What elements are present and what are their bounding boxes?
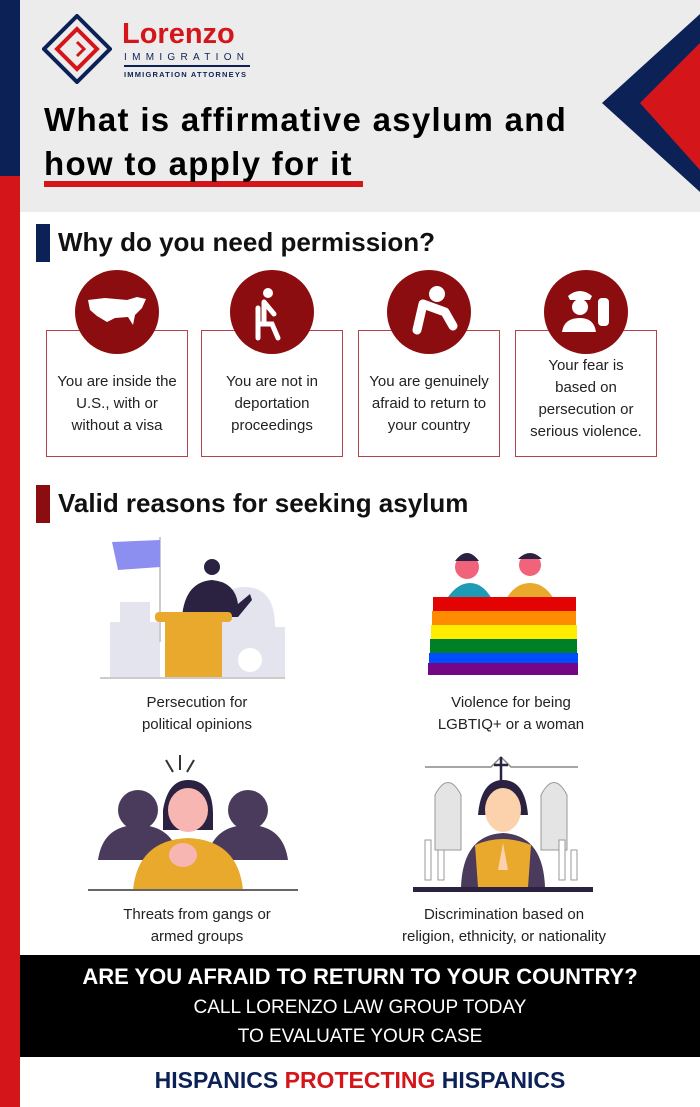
logo: Lorenzo [122,18,235,50]
illustration: gangs [88,755,298,891]
illustration: political [100,537,285,678]
cta band: ARE YOU AFRAID TO RETURN TO YOUR COUNTRY? [82,964,638,989]
card 3: You are genuinely [369,372,489,390]
caption: political [142,694,252,733]
icon: seated person [230,270,314,354]
card 4: based on [555,378,617,396]
caption: LGBTIQ [438,694,584,733]
illustration: religion [413,756,593,892]
card 4: Your fear is [548,356,624,374]
title: What is affirmative asylum and [44,101,567,138]
card 3 [358,270,500,457]
card 1: U.S., with or [76,394,158,412]
card 4: serious violence. [530,422,642,440]
card 4: persecution or [538,400,634,418]
chevron decoration [602,14,700,192]
logo: IMMIGRATION ATTORNEYS [124,70,247,79]
caption: religion: religion, ethnicity, or nationality [402,928,606,945]
card 1: You are inside the [57,372,177,390]
icon: afraid person [387,270,471,354]
illustration: LGBTIQ [428,553,578,675]
icon: police officer [544,270,628,354]
caption: political: Persecution for [147,694,247,711]
logo [42,14,250,84]
caption: gangs: armed groups [151,928,243,945]
title [44,101,567,187]
heading: why permission: Why do you need permission? [58,227,435,257]
cta band [20,955,700,1057]
caption: gangs: Threats from gangs or [123,906,271,923]
heading: valid reasons: Valid reasons for seeking asylum [58,488,468,518]
card 2: deportation [234,394,310,412]
caption: political: political opinions [142,716,252,733]
header background [20,0,700,212]
card 2: proceedings [231,416,313,434]
caption: gangs [123,906,271,945]
icon: us map [75,270,159,354]
card 2 [201,270,343,457]
left stripe [0,0,20,1107]
card 1: without a visa [72,416,162,434]
cta band: TO EVALUATE YOUR CASE [238,1026,482,1047]
caption: LGBTIQ: Violence for being [451,694,571,711]
caption: religion: Discrimination based on [424,906,584,923]
caption: LGBTIQ: LGBTIQ+ or a woman [438,716,584,733]
card 1 [46,270,188,457]
card 4 [515,270,657,457]
card 3: your country [388,416,470,434]
cta band: CALL LORENZO LAW GROUP TODAY [194,997,526,1018]
card 3: afraid to return to [372,394,486,412]
logo: IMMIGRATION [124,52,249,63]
caption: religion [402,906,606,945]
card 2: You are not in [226,372,318,390]
title: how to apply for it [44,145,353,182]
tagline: HISPANICS PROTECTING HISPANICS [155,1067,565,1093]
